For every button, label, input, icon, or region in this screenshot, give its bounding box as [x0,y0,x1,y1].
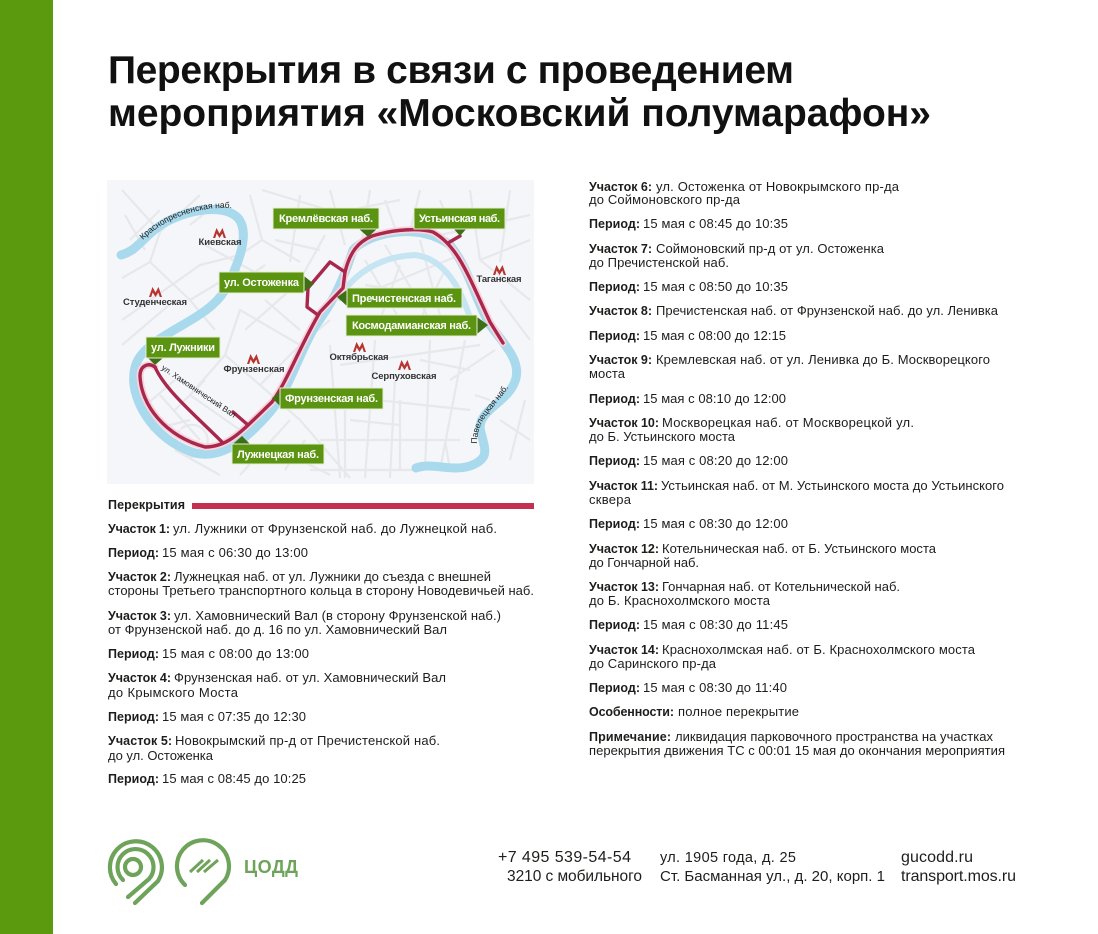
section 14: Краснохолмская наб. от Б. Краснохолмского моста [662,642,976,657]
period 11: 15 мая с 08:30 до 12:00 [643,516,788,531]
map label: Фрунзенская наб.: Фрунзенская наб. [285,393,378,405]
section 2: стороны Третьего транспортного кольца в сторону Новодевичьей наб. [108,583,534,598]
section 9 [589,352,990,381]
street network [122,190,530,478]
section 7: Участок 7: [589,242,652,256]
section 6: ул. Остоженка от Новокрымского пр-да [656,179,900,194]
section 10: до Б. Устьинского моста [589,429,736,444]
note: Примечание: [589,730,671,744]
section 11 [589,478,1004,507]
section 5: Участок 5: [108,734,172,748]
features: полное перекрытие [678,704,799,719]
section 5: до ул. Остоженка [108,748,214,763]
footer contacts: phone: 3210 с мобильного [507,868,642,885]
map label: ул. Остоженка [219,272,304,293]
map label: Фрунзенская наб. [280,388,383,409]
section 8: Пречистенская наб. от Фрунзенской наб. до ул. Ленивка [656,303,999,318]
footer contacts: websites: gucodd.ru [901,849,973,866]
route closure glow [140,230,503,447]
logo wordmark: ЦОДД [244,857,298,877]
left column text [108,521,534,786]
map label: Лужнецкая наб. [232,444,324,464]
section 11: Устьинская наб. от М. Устьинского моста до Устьинского [661,478,1004,493]
river [121,210,517,468]
logo: pin with slashes [177,840,229,903]
section 7: Соймоновский пр-д от ул. Остоженка [656,241,885,256]
section 10: Участок 10: [589,416,659,430]
footer contacts: websites [901,849,1016,885]
period 6: Период: [589,217,640,231]
map label: ул. Лужники: ул. Лужники [151,342,215,354]
period 10: Период: [589,454,640,468]
section 5 [108,733,440,763]
legend: closures: Перекрытия [108,498,185,512]
title: Перекрытия в связи с проведением [108,49,794,92]
metro stations: Серпуховская [372,371,436,382]
section 13: до Б. Краснохолмского моста [589,593,771,608]
logo: pin with rings [110,841,162,903]
period 11: Период: [589,517,640,531]
section 7 [589,241,885,270]
period 4: Период: [108,710,159,724]
features [589,704,799,719]
title [108,49,931,135]
section 2 [108,569,534,598]
section 7: до Пречистенской наб. [589,255,729,270]
period 1: 15 мая с 06:30 до 13:00 [162,545,308,560]
section 12: Котельническая наб. от Б. Устьинского моста [662,541,937,556]
map label: Кремлёвская наб.: Кремлёвская наб. [279,213,373,225]
period 9: 15 мая с 08:10 до 12:00 [643,391,786,406]
footer contacts: phone: +7 495 539-54-54 [498,849,631,866]
green side strip [0,0,53,934]
metro stations [123,228,522,382]
section 1: ул. Лужники от Фрунзенской наб. до Лужнецкой наб. [173,521,497,536]
period 3: Период: [108,647,159,661]
section 3 [108,608,501,637]
section 1: Участок 1: [108,522,170,536]
street name labels: Павелецкая наб. [471,386,508,444]
section 13 [589,579,900,608]
street name labels: ул. Хамовнический Вал [160,363,238,420]
section 6 [589,179,900,207]
section 13: Гончарная наб. от Котельнической наб. [662,579,900,594]
metro stations: Фрунзенская [224,364,284,375]
period 10: 15 мая с 08:20 до 12:00 [643,453,788,468]
section 3: от Фрунзенской наб. до д. 16 по ул. Хамовнический Вал [108,622,447,637]
section 14 [589,642,976,671]
footer contacts: websites: transport.mos.ru [901,868,1016,885]
section 12 [589,541,937,570]
footer contacts: addresses [660,850,885,885]
section 9: Кремлевская наб. от ул. Ленивка до Б. Москворецкого [656,352,990,367]
section 4: Фрунзенская наб. от ул. Хамовнический Вал [174,670,446,685]
section 8: Участок 8: [589,304,652,318]
map label: Космодамианская наб.: Космодамианская наб. [352,320,471,332]
period 14: Период: [589,681,640,695]
period 13: 15 мая с 08:30 до 11:45 [643,617,788,632]
footer contacts: addresses: Ст. Басманная ул., д. 20, корп. 1 [660,868,885,885]
map label: Устьинская наб. [414,208,505,229]
section 10 [589,415,914,444]
metro stations: Киевская [198,237,242,248]
street name labels: Краснопресненская наб. [139,202,232,240]
map label: ул. Лужники [146,337,220,358]
section 4: Участок 4: [108,671,171,685]
map label: Устьинская наб.: Устьинская наб. [419,213,500,225]
right column text [589,179,1005,758]
map panel [107,180,534,484]
section 10: Москворецкая наб. от Москворецкой ул. [662,415,914,430]
title: мероприятия «Московский полумарафон» [108,92,931,135]
map label: Кремлёвская наб. [273,208,379,229]
section 2: Участок 2: [108,570,171,584]
period 5: 15 мая с 08:45 до 10:25 [162,771,306,786]
period 7: 15 мая с 08:50 до 10:35 [643,279,788,294]
canal [338,255,470,318]
section 14: Участок 14: [589,643,659,657]
period 5: Период: [108,772,159,786]
note: ликвидация парковочного пространства на участках [675,729,994,744]
footer contacts: phone [498,849,642,885]
note [589,729,1005,758]
section 13: Участок 13: [589,580,659,594]
section 11: сквера [589,492,632,507]
section 3: ул. Хамовнический Вал (в сторону Фрунзенской наб.) [174,608,501,623]
period 8: Период: [589,329,640,343]
period 7: Период: [589,280,640,294]
section 5: Новокрымский пр-д от Пречистенской наб. [175,733,440,748]
section 11: Участок 11: [589,479,658,493]
map label: Космодамианская наб. [346,315,477,336]
section 9: Участок 9: [589,353,652,367]
period 13: Период: [589,618,640,632]
period 3: 15 мая с 08:00 до 13:00 [162,646,309,661]
metro stations: Октябрьская [330,352,388,363]
footer contacts: addresses: ул. 1905 года, д. 25 [660,850,796,866]
note: перекрытия движения ТС с 00:01 15 мая до окончания мероприятия [589,743,1005,758]
features: Особенности: [589,705,674,719]
period 6: 15 мая с 08:45 до 10:35 [643,216,788,231]
map label: Пречистенская наб. [347,288,462,308]
section 9: моста [589,366,626,381]
street name labels [139,202,508,444]
metro stations: Студенческая [123,297,187,308]
period 9: Период: [589,392,640,406]
map label: Лужнецкая наб.: Лужнецкая наб. [237,449,319,461]
section 12: Участок 12: [589,542,659,556]
period 1: Период: [108,546,159,560]
metro stations: Таганская [476,274,522,285]
legend: closures [108,498,534,512]
section 4: до Крымского Моста [108,685,239,700]
period 14: 15 мая с 08:30 до 11:40 [643,680,787,695]
section 14: до Саринского пр-да [589,656,717,671]
section 12: до Гончарной наб. [589,555,699,570]
label pointers [148,228,488,444]
route closure lines [140,230,503,447]
section 6: Участок 6: [589,180,652,194]
section 2: Лужнецкая наб. от ул. Лужники до съезда с внешней [174,569,491,584]
map label: Пречистенская наб.: Пречистенская наб. [352,293,456,305]
section 6: до Соймоновского пр-да [589,192,741,207]
section 4 [108,670,446,700]
period 8: 15 мая с 08:00 до 12:15 [643,328,786,343]
section 3: Участок 3: [108,609,171,623]
period 4: 15 мая с 07:35 до 12:30 [162,709,306,724]
map label: ул. Остоженка: ул. Остоженка [224,277,300,289]
